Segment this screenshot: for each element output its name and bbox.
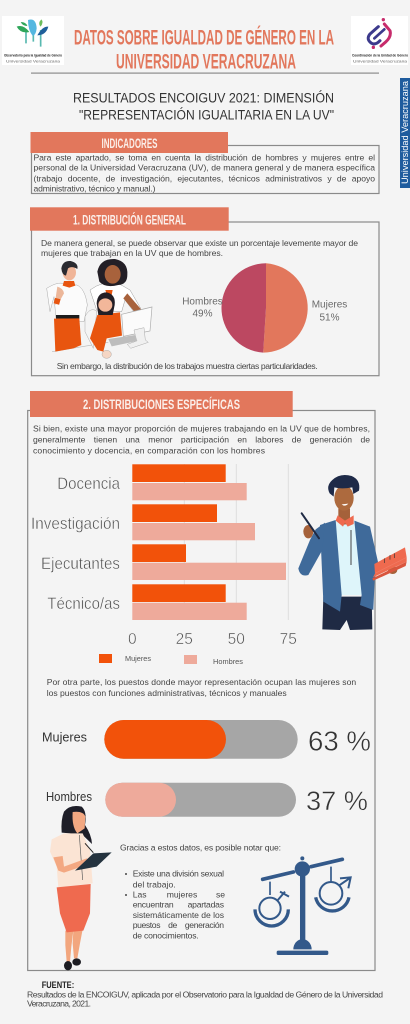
- logo: Coordinación de la Unidad de Género: [351, 16, 408, 65]
- legend: Mujeres: [125, 656, 152, 663]
- heading: distribuciones específicas: [30, 391, 293, 417]
- heading: indicadores: INDICADORES: [102, 136, 158, 151]
- logo: Observatorio para la Igualdad de Género: Universidad Veracruzana: [6, 60, 61, 64]
- bullet list: conclusiones: [125, 869, 225, 940]
- heading: distribuciones específicas: 2. DISTRIBUCIONES ESPECÍFICAS: [83, 397, 240, 412]
- bar chart: mujeres y hombres por tipo de puesto: Ejecutantes: [41, 555, 120, 573]
- bullet list: conclusiones: mujeres: [167, 890, 197, 900]
- progress bar: mujeres 63 %: Mujeres: [42, 731, 87, 745]
- source note: Veracruzana, 2021.: [27, 999, 91, 1009]
- panel: indicadores: [30, 132, 379, 194]
- bar chart: mujeres y hombres por tipo de puesto: [31, 464, 297, 666]
- bullet list: conclusiones: encuentran apartadas: [133, 900, 224, 910]
- text: indicadores: [34, 152, 375, 194]
- source note: FUENTE:: [42, 980, 74, 990]
- pie chart: hombres y mujeres: Hombres: [182, 296, 223, 308]
- text: sin embargo: Sin embargo, la distribución de los trabajos muestra ciertas particularidades.: [57, 361, 318, 371]
- text: distribución general intro: mujeres que trabajan en la UV que de hombres.: [41, 248, 223, 258]
- illustration: three workers: [47, 259, 152, 358]
- bullet list: conclusiones: se: [216, 890, 225, 900]
- bar chart: mujeres y hombres por tipo de puesto: 0: [128, 631, 137, 648]
- bar chart: mujeres y hombres por tipo de puesto: 25: [176, 631, 193, 648]
- text: indicadores: personal de la Universidad Veracruzana (UV), de manera general y de manera específica: [34, 163, 375, 173]
- subtitle: RESULTADOS ENCOIGUV 2021: DIMENSIÓN: [73, 91, 334, 106]
- text: indicadores: (trabajo docente, de investigación, ejecutantes, técnicos administrativos y de apoyo: [34, 174, 375, 184]
- text: distribuciones intro: [33, 424, 370, 455]
- progress bar: hombres 37 %: [46, 783, 368, 817]
- pie chart: hombres y mujeres: [182, 263, 347, 353]
- legend: Hombres: [213, 659, 244, 666]
- text: distribuciones intro: generalmente tienen una menor participación en labores de generación de: [33, 435, 370, 445]
- bullet list: conclusiones: del trabajo.: [133, 879, 176, 889]
- legend: [99, 654, 244, 666]
- logo: Coordinación de la Unidad de Género: Coordinación de la Unidad de Género: [352, 54, 408, 58]
- illustration: man with book: [298, 475, 407, 630]
- title: [74, 26, 334, 74]
- heading: indicadores: [30, 132, 228, 153]
- text: indicadores: administrativo, técnico y manual.): [34, 184, 156, 194]
- progress bar: hombres 37 %: Hombres: [46, 790, 92, 804]
- illustration: woman with clipboard: [50, 806, 112, 970]
- logo: Observatorio para la Igualdad de Género: [2, 16, 64, 65]
- bar chart: mujeres y hombres por tipo de puesto: Técnico/as: [47, 595, 120, 613]
- panel: distribución general: [30, 207, 379, 376]
- bullet list: conclusiones: puestos de generación: [133, 920, 224, 930]
- text: por otra parte: Por otra parte, los puestos donde mayor representación ocupan las mujeres son: [47, 677, 356, 687]
- progress bar: mujeres 63 %: [42, 720, 371, 759]
- text: distribución general intro: De manera general, se puede observar que existe un porcentaje levemente mayor de: [41, 238, 358, 248]
- source note: [27, 980, 383, 1009]
- icon: gender balance scale: [255, 856, 351, 955]
- text: gracias a estos datos: Gracias a estos datos, es posible notar que:: [120, 843, 281, 853]
- bar chart: mujeres y hombres por tipo de puesto: 50: [228, 631, 245, 648]
- heading: distribución general: 1. DISTRIBUCIÓN GENERAL: [73, 212, 186, 228]
- text: distribuciones intro: conocimiento y docencia, en comparación con los hombres: [33, 445, 265, 455]
- text: por otra parte: [47, 677, 356, 698]
- text: por otra parte: los puestos con funciones administrativas, técnicos y manuales: [47, 688, 287, 698]
- text: distribuciones intro: Si bien, existe una mayor proporción de mujeres trabajando en la UV que de hombres,: [33, 424, 370, 434]
- heading: distribución general: [30, 207, 229, 231]
- bullet list: conclusiones: de conocimientos.: [133, 930, 199, 940]
- bullet list: conclusiones: sistemáticamente de los: [133, 910, 224, 920]
- progress bar: hombres 37 %: 37 %: [306, 786, 368, 816]
- text: indicadores: Para este apartado, se toma en cuenta la distribución de hombres y mujeres entre el: [34, 152, 375, 162]
- subtitle: "REPRESENTACIÓN IGUALITARIA EN LA UV": [79, 108, 334, 122]
- bar chart: mujeres y hombres por tipo de puesto: Investigación: [31, 515, 120, 533]
- progress bar: mujeres 63 %: 63 %: [308, 726, 371, 756]
- text: distribución general intro: [41, 238, 358, 258]
- subtitle: [73, 91, 334, 122]
- bar chart: mujeres y hombres por tipo de puesto: Docencia: [57, 475, 121, 493]
- source note: Resultados de la ENCOIGUV, aplicada por el Observatorio para la Igualdad de Género de la Universidad: [27, 989, 383, 999]
- bullet list: conclusiones: Las: [133, 890, 147, 900]
- pie chart: hombres y mujeres: Mujeres: [312, 300, 347, 310]
- bullet list: conclusiones: Existe una división sexual: [133, 869, 224, 879]
- logo: Coordinación de la Unidad de Género: Universidad Veracruzana: [353, 60, 408, 64]
- logo: Observatorio para la Igualdad de Género: Observatorio para la Igualdad de Género: [4, 54, 62, 58]
- pie chart: hombres y mujeres: 51%: [319, 312, 340, 324]
- pie chart: hombres y mujeres: 49%: [192, 308, 213, 320]
- bar chart: mujeres y hombres por tipo de puesto: 75: [280, 631, 297, 648]
- panel: distribuciones específicas: [28, 391, 407, 970]
